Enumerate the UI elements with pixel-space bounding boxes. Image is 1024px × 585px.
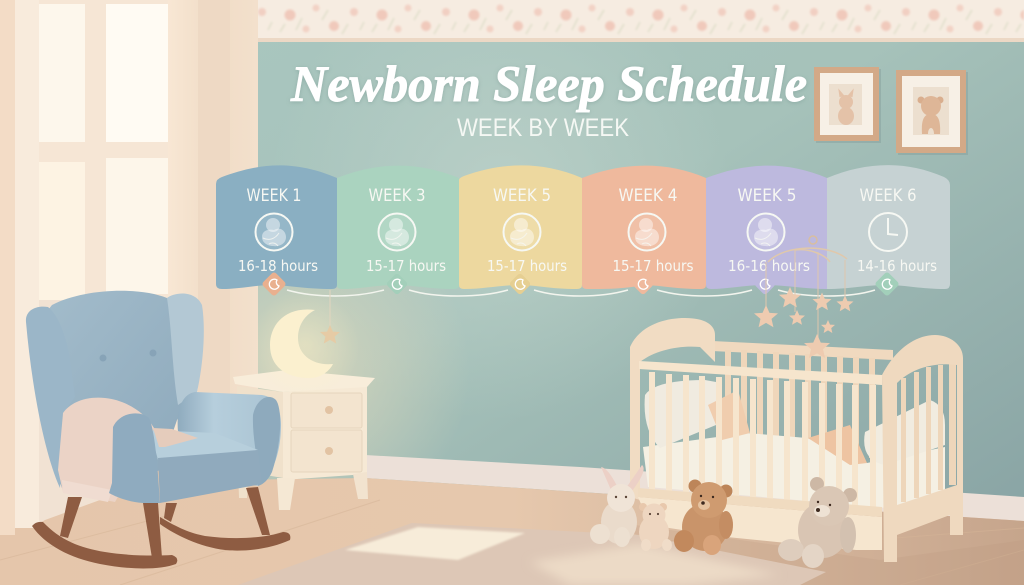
card: week 5 yellow — [459, 165, 582, 295]
chair back — [37, 291, 203, 495]
timeline of weekly cards — [216, 165, 950, 297]
blanket on seat — [153, 428, 198, 447]
rocking chair — [26, 291, 290, 568]
plush beige bear — [778, 477, 857, 568]
chair buttons — [100, 350, 156, 362]
crib right side slats — [901, 363, 956, 502]
framed picture: llama — [814, 67, 881, 143]
crib bottom drawer — [638, 497, 882, 550]
card: week 3 — [337, 166, 459, 295]
card: week 6: WEEK 6 — [860, 186, 916, 205]
wall — [250, 0, 1024, 510]
card: week 3: WEEK 3 — [368, 186, 426, 205]
chair seat front — [158, 450, 262, 503]
window — [30, 0, 175, 320]
card: week 5 purple: 16-16 hours — [728, 257, 810, 275]
crib back rail and slats — [712, 341, 893, 458]
framed picture: bear — [896, 70, 968, 155]
card: week 1: 16-18 hours — [238, 257, 318, 275]
chair front arm — [109, 413, 160, 503]
card: week 6: 14-16 hours — [857, 257, 937, 275]
chair right arm — [178, 392, 281, 486]
crib bottom rail — [638, 488, 882, 517]
chair left wing — [26, 307, 75, 488]
plush brown bear — [674, 480, 733, 555]
card: week 5 purple — [706, 166, 827, 295]
subtitle: WEEK BY WEEK — [457, 114, 629, 142]
title: Newborn Sleep Schedule — [290, 57, 807, 113]
chair right arm front — [253, 397, 280, 486]
arrows between weeks — [287, 290, 875, 296]
baseboard — [365, 455, 1024, 521]
card: week 5 yellow: WEEK 5 — [493, 186, 551, 205]
card: week 4: 15-17 hours — [612, 257, 694, 275]
card: week 3: 15-17 hours — [366, 257, 446, 275]
chair seat top — [150, 430, 258, 460]
card: week 1 — [216, 165, 337, 297]
hanging star — [320, 290, 340, 344]
card: week 5 yellow: 15-17 hours — [487, 257, 567, 275]
baby mobile — [754, 236, 854, 358]
nightstand — [233, 370, 375, 510]
moon lamp — [250, 290, 360, 400]
card: week 1: WEEK 1 — [246, 186, 302, 205]
curtains — [0, 0, 258, 535]
crib — [630, 318, 963, 562]
chair right wing — [167, 294, 204, 405]
blanket — [58, 398, 154, 502]
card: week 4 — [582, 166, 706, 295]
crib pillows — [645, 380, 945, 465]
chair rockers and legs — [32, 487, 290, 568]
card: week 5 purple: WEEK 5 — [738, 186, 796, 205]
plush small bear — [639, 503, 672, 551]
crib front rail — [639, 361, 882, 385]
crib left headboard — [630, 318, 715, 500]
rug — [238, 523, 826, 585]
crib front slats — [649, 372, 876, 507]
blanket fringe — [62, 480, 112, 502]
plush bunny — [590, 465, 644, 547]
crib right end — [882, 335, 963, 562]
wallpaper border — [256, 0, 1024, 42]
crib mattress — [643, 433, 945, 515]
floor — [0, 478, 1024, 585]
card: week 4: WEEK 4 — [618, 186, 678, 205]
card: week 6 — [827, 165, 950, 297]
